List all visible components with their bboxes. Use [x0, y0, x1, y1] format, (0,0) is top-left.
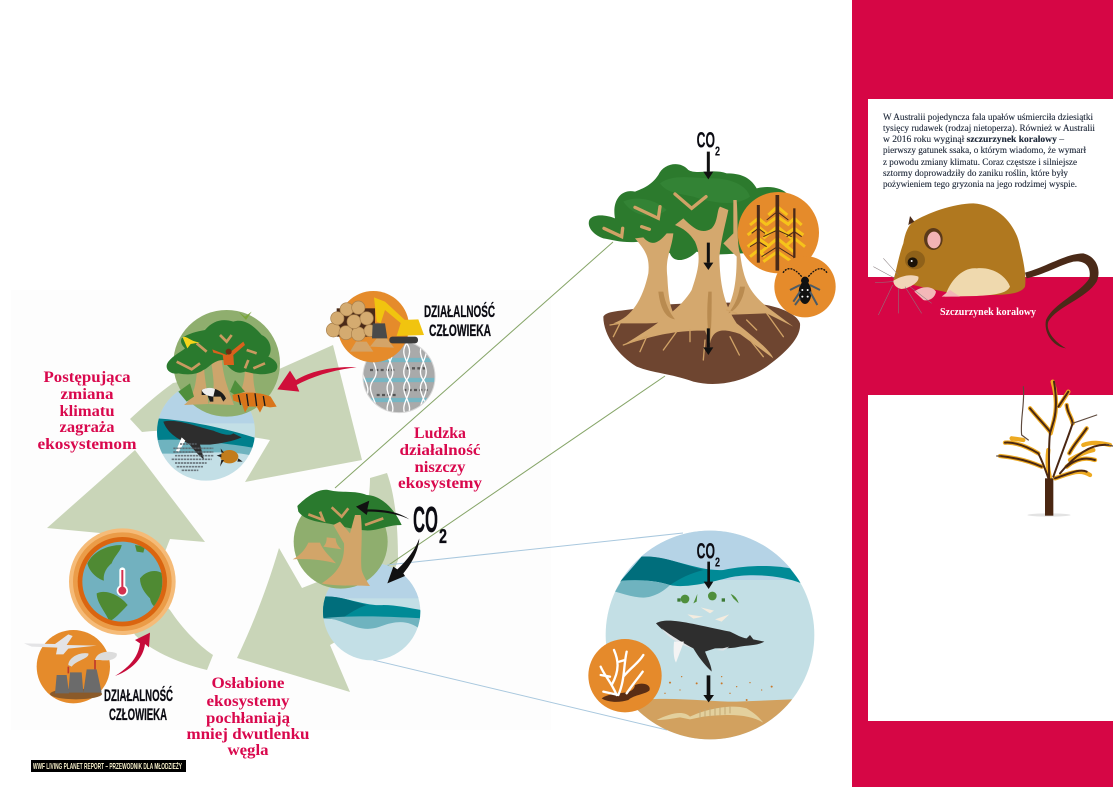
- snout: [893, 275, 919, 289]
- illustration: large forest with soil: 2: [715, 145, 720, 159]
- heading: Ludzka działalność: Ludzka: [414, 425, 466, 442]
- illustration: degraded habitat circle: [362, 341, 437, 417]
- whale: [656, 621, 764, 672]
- panel: cycle background: [11, 290, 551, 730]
- heading: Postępująca zmiana: ekosystemom: [38, 436, 137, 453]
- icon: burnt forest: [738, 192, 819, 273]
- text block: sidebar copy: pożywieniem tego gryzonia na jego rodzimej wyspie.: [883, 179, 1077, 189]
- trunks: [613, 200, 793, 358]
- illustration: large ocean circle: 2: [715, 556, 720, 570]
- illustration: dead tree: [997, 382, 1113, 517]
- cycle arrow: bottom right: [237, 473, 398, 692]
- ear: [924, 228, 943, 250]
- heading: Ludzka działalność: [398, 425, 482, 492]
- cycle arrow: top right: [130, 345, 362, 482]
- arrows down: [703, 152, 713, 355]
- panel: red sidebar: [852, 0, 1113, 787]
- waves: [620, 557, 802, 586]
- icon: CO2 label with arrows: [356, 499, 447, 583]
- caption: rodent name: Szczurzynek koralowy: [940, 307, 1036, 318]
- footer badge: WWF LIVING PLANET REPORT – PRZEWODNIK DLA MŁODZIEŻY: [33, 761, 182, 771]
- label: działalność człowieka bottom: CZŁOWIEKA: [109, 705, 167, 724]
- illustration: orange logging circle: [326, 291, 424, 362]
- connector lines: ocean zoom: [373, 533, 683, 730]
- sediment: [664, 676, 773, 701]
- canopy highlight: [623, 177, 750, 216]
- body: [893, 203, 1025, 295]
- label: działalność człowieka bottom: DZIAŁALNOŚĆ: [104, 686, 173, 705]
- heading: Postępująca zmiana: Postępująca: [44, 369, 131, 386]
- icon: CO2 label with arrows: 2: [439, 526, 447, 548]
- illustration: lower forest circle: [293, 490, 402, 589]
- heading: Postępująca zmiana: zmiana: [60, 386, 114, 403]
- CO2: CO: [697, 538, 715, 563]
- CO2: CO: [697, 127, 715, 152]
- label: działalność człowieka top: DZIAŁALNOŚĆ: [424, 302, 495, 321]
- cycle arrow: left: [47, 450, 213, 670]
- heading: Postępująca zmiana: [38, 369, 137, 453]
- connector lines: forest zoom: [335, 242, 665, 573]
- arrow: red to globe: [115, 633, 150, 676]
- heading: Osłabione ekosystemy: mniej dwutlenku: [186, 726, 310, 743]
- text block: sidebar copy: tysięcy rudawek (rodzaj nietoperza). Również w Australii: [883, 123, 1095, 133]
- footer badge: [31, 760, 186, 772]
- illustration: forest circle small with animals: [167, 310, 280, 417]
- illustration: large forest with soil: [589, 127, 836, 384]
- label: działalność człowieka top: CZŁOWIEKA: [429, 321, 491, 340]
- sand: [638, 698, 792, 740]
- branches and roots: [604, 194, 783, 360]
- trunk shading: [658, 287, 745, 343]
- heading: Postępująca zmiana: klimatu: [60, 403, 115, 420]
- illustration: globe with thermometer: [69, 528, 176, 635]
- arrow: red to forest: [277, 367, 357, 392]
- illustration: lower ocean circle: [322, 562, 422, 662]
- heading: Osłabione ekosystemy: [186, 675, 310, 759]
- icon: CO2 label with arrows: CO: [413, 499, 438, 540]
- label: działalność człowieka top: [424, 302, 495, 340]
- heading: Ludzka działalność: niszczy: [414, 459, 466, 476]
- heading: Ludzka działalność: ekosystemy: [398, 475, 482, 492]
- icon: beetle: [774, 256, 836, 317]
- soil: [603, 303, 800, 384]
- eye patch: [905, 251, 925, 269]
- text block: sidebar copy: z powodu zmiany klimatu. Coraz częstsze i silniejsze: [883, 157, 1077, 167]
- belly: [945, 268, 1010, 297]
- canopy: [589, 164, 788, 260]
- paws: [914, 287, 960, 300]
- heading: Ludzka działalność: działalność: [400, 442, 481, 459]
- plankton: [677, 592, 739, 622]
- label: działalność człowieka bottom: [104, 686, 173, 724]
- whiskers: [873, 258, 932, 315]
- illustration: emissions circle: [24, 630, 117, 703]
- water: [603, 530, 817, 743]
- tail: [1025, 253, 1099, 348]
- illustration: large ocean circle: [588, 530, 817, 743]
- arrows down: [703, 562, 714, 702]
- heading: Osłabione ekosystemy: ekosystemy: [206, 693, 290, 710]
- illustration: coral melomys rodent: [873, 203, 1099, 348]
- skeleton: [657, 707, 763, 723]
- heading: Osłabione ekosystemy: pochłaniają: [206, 710, 290, 727]
- heading: Postępująca zmiana: zagraża: [60, 419, 115, 436]
- text block: sidebar copy: w 2016 roku wyginął szczurzynek koralowy –: [883, 134, 1065, 144]
- text block: sidebar copy: sztormy doprowadziły do zaniku roślin, które były: [883, 168, 1069, 178]
- text block: sidebar copy: [883, 112, 1095, 189]
- text block: sidebar copy: W Australii pojedyncza fala upałów uśmierciła dziesiątki: [883, 112, 1094, 122]
- illustration: ocean circle small with whale: [157, 390, 255, 481]
- heading: Osłabione ekosystemy: węgla: [228, 742, 269, 759]
- icon: bleached coral: [588, 639, 662, 712]
- text block: sidebar copy: pierwszy gatunek ssaka, o którym wiadomo, że wymarł: [883, 145, 1087, 155]
- heading: Osłabione ekosystemy: Osłabione: [212, 675, 285, 692]
